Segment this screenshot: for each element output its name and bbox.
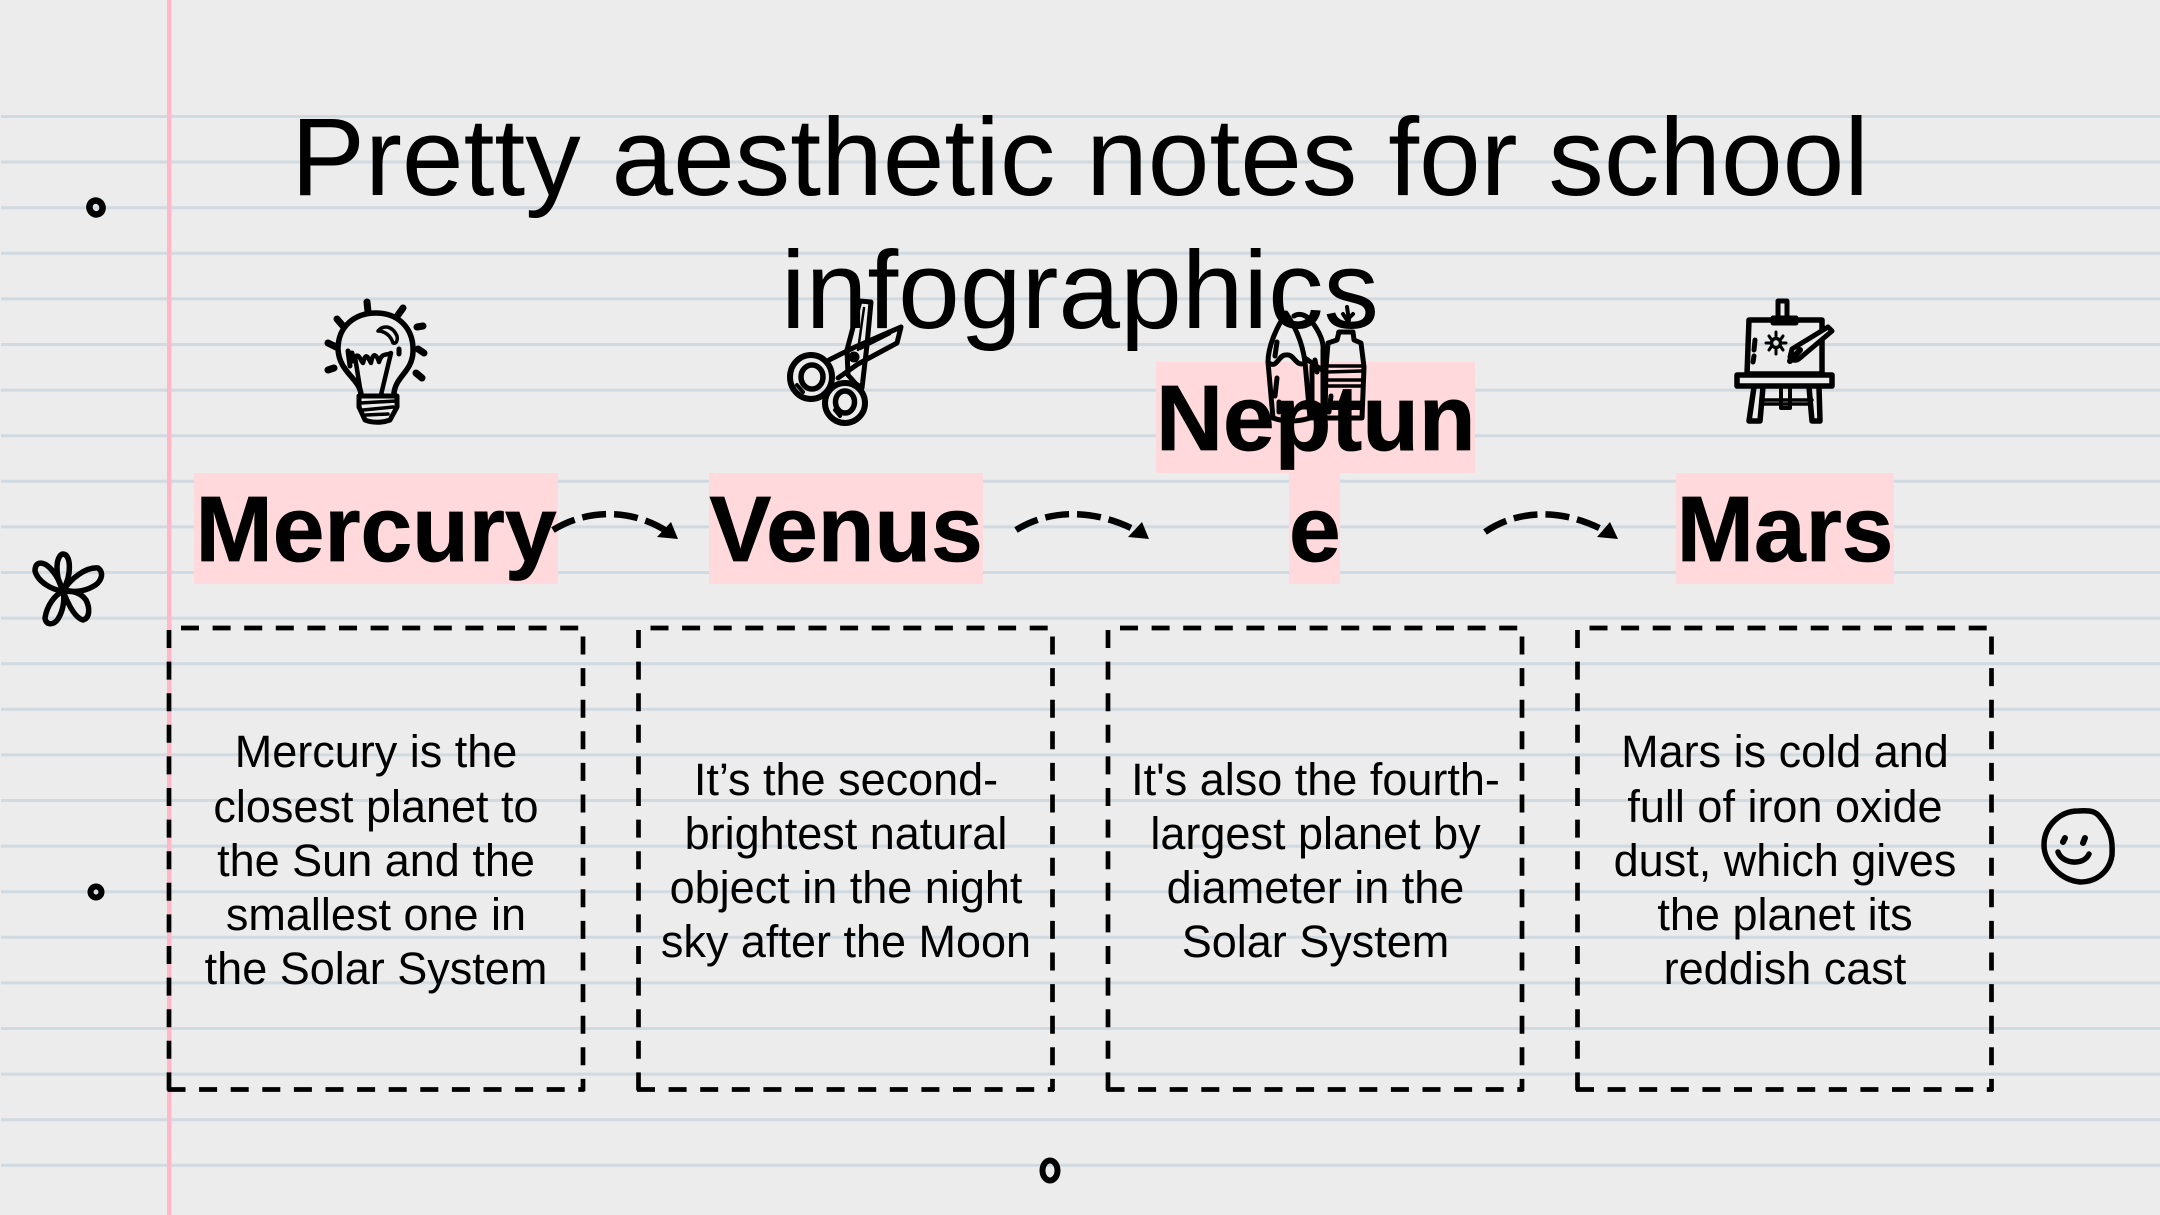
text: Venus description: brightest natural [685,808,1007,859]
doodle: smiley face [2044,811,2112,882]
text: Venus description: sky after the Moon [661,916,1031,967]
text: Neptune description: diameter in the [1167,862,1464,913]
doodle: ring top left [87,198,105,217]
heading: Mars: Mars [1677,477,1893,581]
text: Neptune description: It's also the fourth- [1131,754,1500,805]
heading: Mercury: Mercury [195,477,557,581]
arrow: Neptune to Mars [1485,514,1618,539]
text: Mercury description: the Sun and the [217,835,535,886]
doodle: ring bottom [1042,1160,1058,1180]
text: Venus description: object in the night [670,862,1022,913]
heading: Neptune [1156,362,1476,584]
text: Mars description: dust, which gives [1614,835,1956,886]
text: Mars description: Mars is cold and [1621,726,1949,777]
arrow: Mercury to Venus [553,514,678,539]
text: Venus description: It’s the second- [694,754,998,805]
icon: painting easel [1737,301,1832,421]
dashed box: Venus [637,628,1054,1091]
dashed box: Mercury [168,628,584,1091]
text: Mercury description: Mercury is the [235,726,517,777]
heading: Venus: Venus [709,477,983,581]
text: Mercury description: smallest one in [226,889,526,940]
icon: crayons and paint tube [1268,307,1364,421]
text: Mars description: the planet its [1657,889,1913,940]
heading: Neptune: Neptun [1156,366,1476,470]
title: infographics [781,228,1379,352]
arrow: Venus to Neptune [1016,514,1149,539]
text: Neptune description: Solar System [1182,916,1449,967]
text: Mars description: reddish cast [1664,943,1906,994]
text: Mercury description: closest planet to [213,781,539,832]
doodle: flower [35,554,102,624]
text: Mercury description [205,726,547,994]
text: Mercury description: the Solar System [205,943,547,994]
title: Pretty aesthetic notes for school [291,95,1869,219]
text: Venus description [661,754,1031,967]
dashed box: Neptune [1106,628,1524,1091]
text: Mars description [1614,726,1956,994]
text: Neptune description: largest planet by [1150,808,1481,859]
text: Mars description: full of iron oxide [1627,781,1943,832]
text: Neptune description [1131,754,1500,967]
icon: light bulb [328,302,424,422]
title [291,95,1869,352]
doodle: ring lower left [90,886,102,898]
heading: Neptune: e [1289,477,1341,581]
icon: scissors [790,301,901,423]
dashed box: Mars [1576,628,1993,1091]
